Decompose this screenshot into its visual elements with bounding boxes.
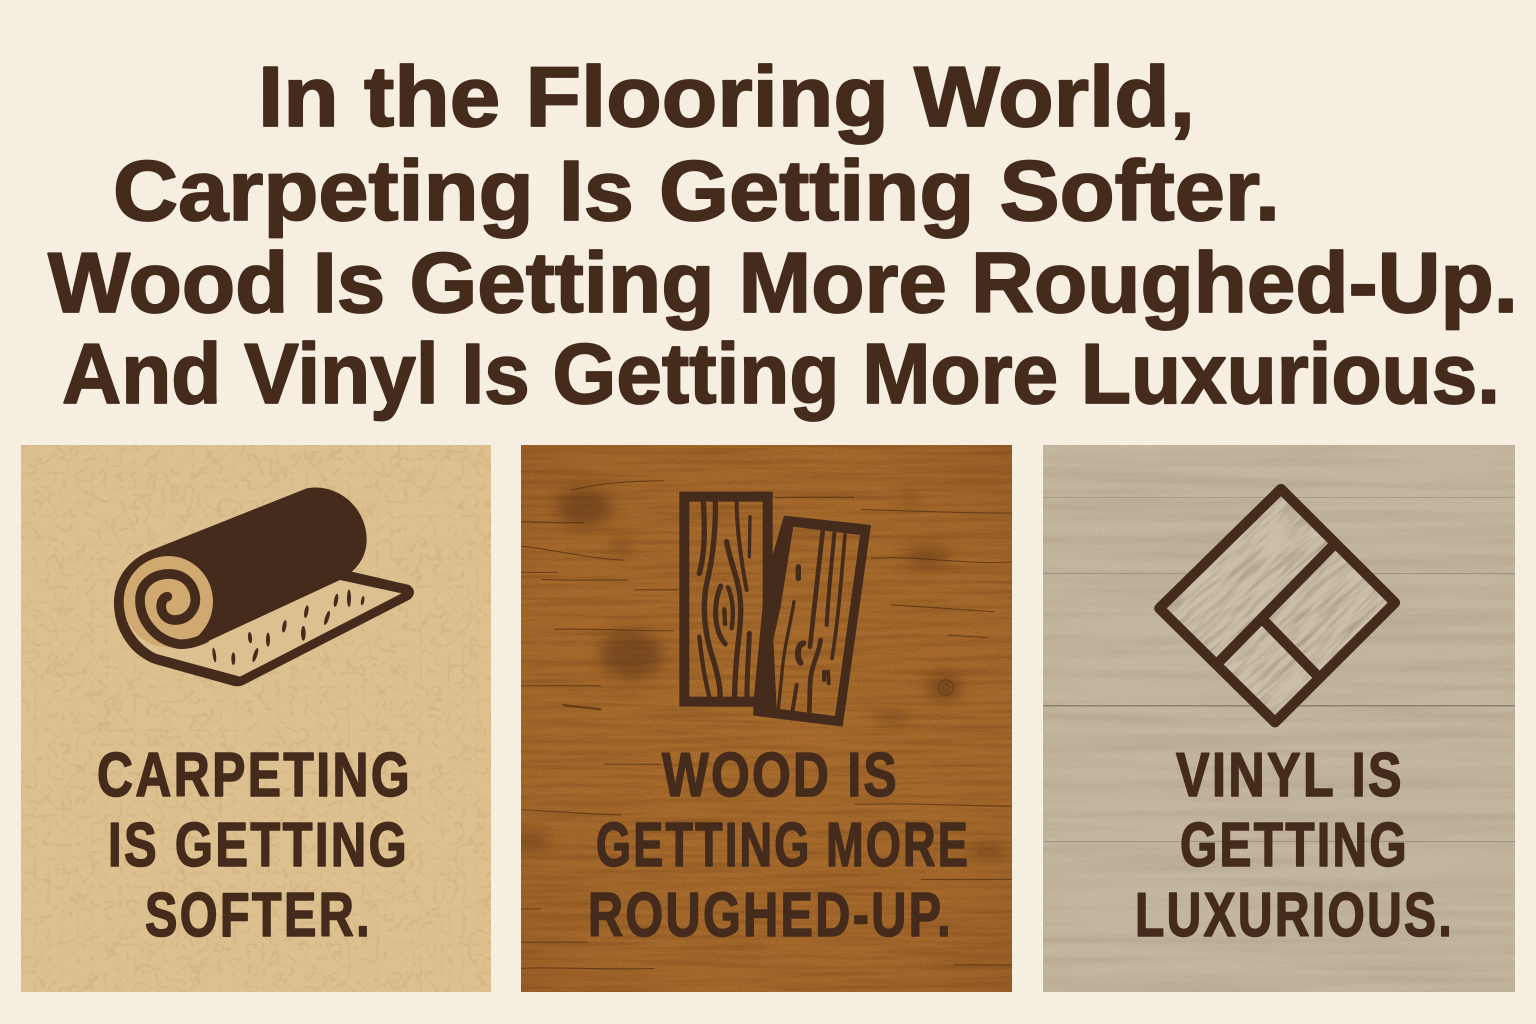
label: wood: GETTING MORE	[596, 811, 970, 880]
right plank grain	[778, 532, 845, 712]
vinyl texture background	[1043, 445, 1515, 992]
icon: wood planks	[684, 497, 871, 727]
label: vinyl	[1135, 741, 1454, 950]
label: vinyl: LUXURIOUS.	[1135, 881, 1454, 950]
panel: wood	[511, 445, 1012, 992]
panel: carpeting	[21, 445, 491, 992]
carpet fibre marks	[212, 590, 365, 665]
wood texture background	[511, 445, 1012, 992]
carpet texture background	[21, 445, 491, 992]
label: carpeting	[97, 741, 412, 950]
title	[48, 50, 1518, 422]
title: Wood Is Getting More Roughed-Up.	[48, 236, 1518, 331]
label: wood: ROUGHED-UP.	[588, 881, 953, 950]
label: carpeting: SOFTER.	[145, 881, 372, 950]
panel: vinyl	[1043, 445, 1515, 992]
title: And Vinyl Is Getting More Luxurious.	[62, 327, 1500, 422]
label: carpeting: CARPETING	[97, 741, 412, 810]
label: vinyl: GETTING	[1180, 811, 1409, 880]
label: wood	[588, 741, 970, 950]
title: In the Flooring World,	[258, 50, 1195, 145]
label: vinyl: VINYL IS	[1176, 741, 1404, 810]
left plank grain	[699, 502, 750, 697]
label: carpeting: IS GETTING	[108, 811, 409, 880]
icon: carpet roll	[114, 488, 414, 686]
title: Carpeting Is Getting Softer.	[113, 144, 1280, 239]
icon: vinyl tile diamond	[1154, 484, 1400, 728]
label: wood: WOOD IS	[662, 741, 899, 810]
